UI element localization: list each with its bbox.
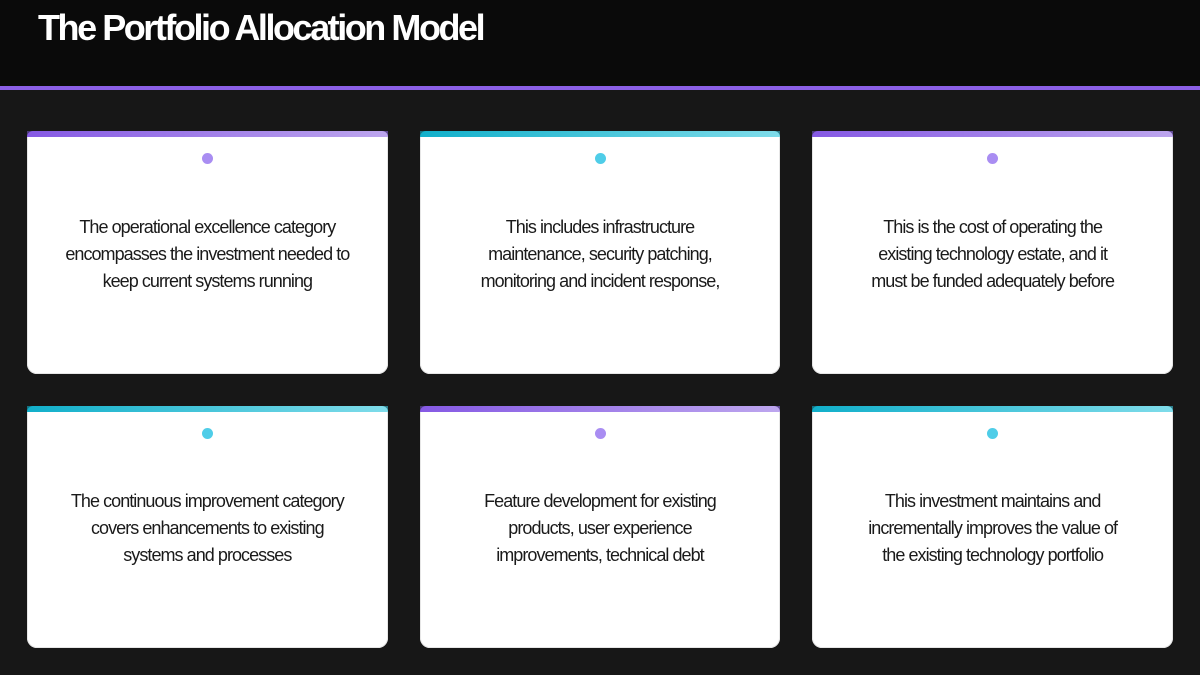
panel: operational excellence — [27, 131, 388, 374]
text: infrastructure maintenance: This includes infrastructure — [506, 216, 694, 236]
text: operational excellence: encompasses the investment needed to — [65, 244, 349, 264]
text: feature development: Feature development for existing — [484, 491, 716, 511]
top accent bar: purple — [27, 131, 388, 137]
text: portfolio value: incrementally improves the value of — [868, 518, 1117, 538]
text: operational excellence: The operational excellence category — [79, 216, 335, 236]
top accent bar: cyan — [27, 406, 388, 412]
text: continuous improvement — [71, 491, 345, 565]
top accent bar: cyan — [812, 406, 1173, 412]
header accent rule — [0, 86, 1200, 90]
text: portfolio value — [868, 491, 1118, 565]
text: infrastructure maintenance — [481, 216, 719, 291]
text: infrastructure maintenance: maintenance, security patching, — [488, 244, 712, 264]
panel: portfolio value — [812, 406, 1173, 648]
header band — [0, 0, 1200, 86]
dot marker: cyan — [595, 153, 606, 164]
text: continuous improvement: systems and processes — [123, 545, 291, 565]
text: operational excellence: keep current systems running — [103, 270, 312, 290]
text: cost of operating: This is the cost of operating the — [883, 216, 1102, 236]
panel: continuous improvement — [27, 406, 388, 648]
text: cost of operating: existing technology estate, and it — [878, 244, 1107, 264]
text: operational excellence — [65, 216, 350, 291]
panel: cost of operating — [812, 131, 1173, 374]
text: feature development: improvements, technical debt — [496, 545, 704, 565]
top accent bar: cyan — [420, 131, 780, 137]
dot marker: purple — [202, 153, 213, 164]
dot marker: purple — [595, 428, 606, 438]
panel: feature development — [420, 406, 780, 648]
text: portfolio value: the existing technology portfolio — [882, 545, 1103, 565]
title: The Portfolio Allocation Model — [38, 7, 483, 48]
top accent bar: purple — [420, 406, 780, 412]
text: continuous improvement: covers enhancements to existing — [91, 518, 324, 538]
text: feature development — [484, 491, 716, 565]
text: infrastructure maintenance: monitoring and incident response, — [481, 270, 719, 290]
text: portfolio value: This investment maintains and — [885, 491, 1100, 511]
dot marker: cyan — [987, 428, 998, 438]
text: cost of operating: must be funded adequately before — [871, 270, 1114, 290]
dot marker: purple — [987, 153, 998, 164]
text: feature development: products, user experience — [508, 518, 692, 538]
text: cost of operating — [871, 216, 1114, 291]
top accent bar: purple — [812, 131, 1173, 137]
text: continuous improvement: The continuous improvement category — [71, 491, 344, 511]
panel: infrastructure maintenance — [420, 131, 780, 374]
dot marker: cyan — [202, 428, 213, 438]
